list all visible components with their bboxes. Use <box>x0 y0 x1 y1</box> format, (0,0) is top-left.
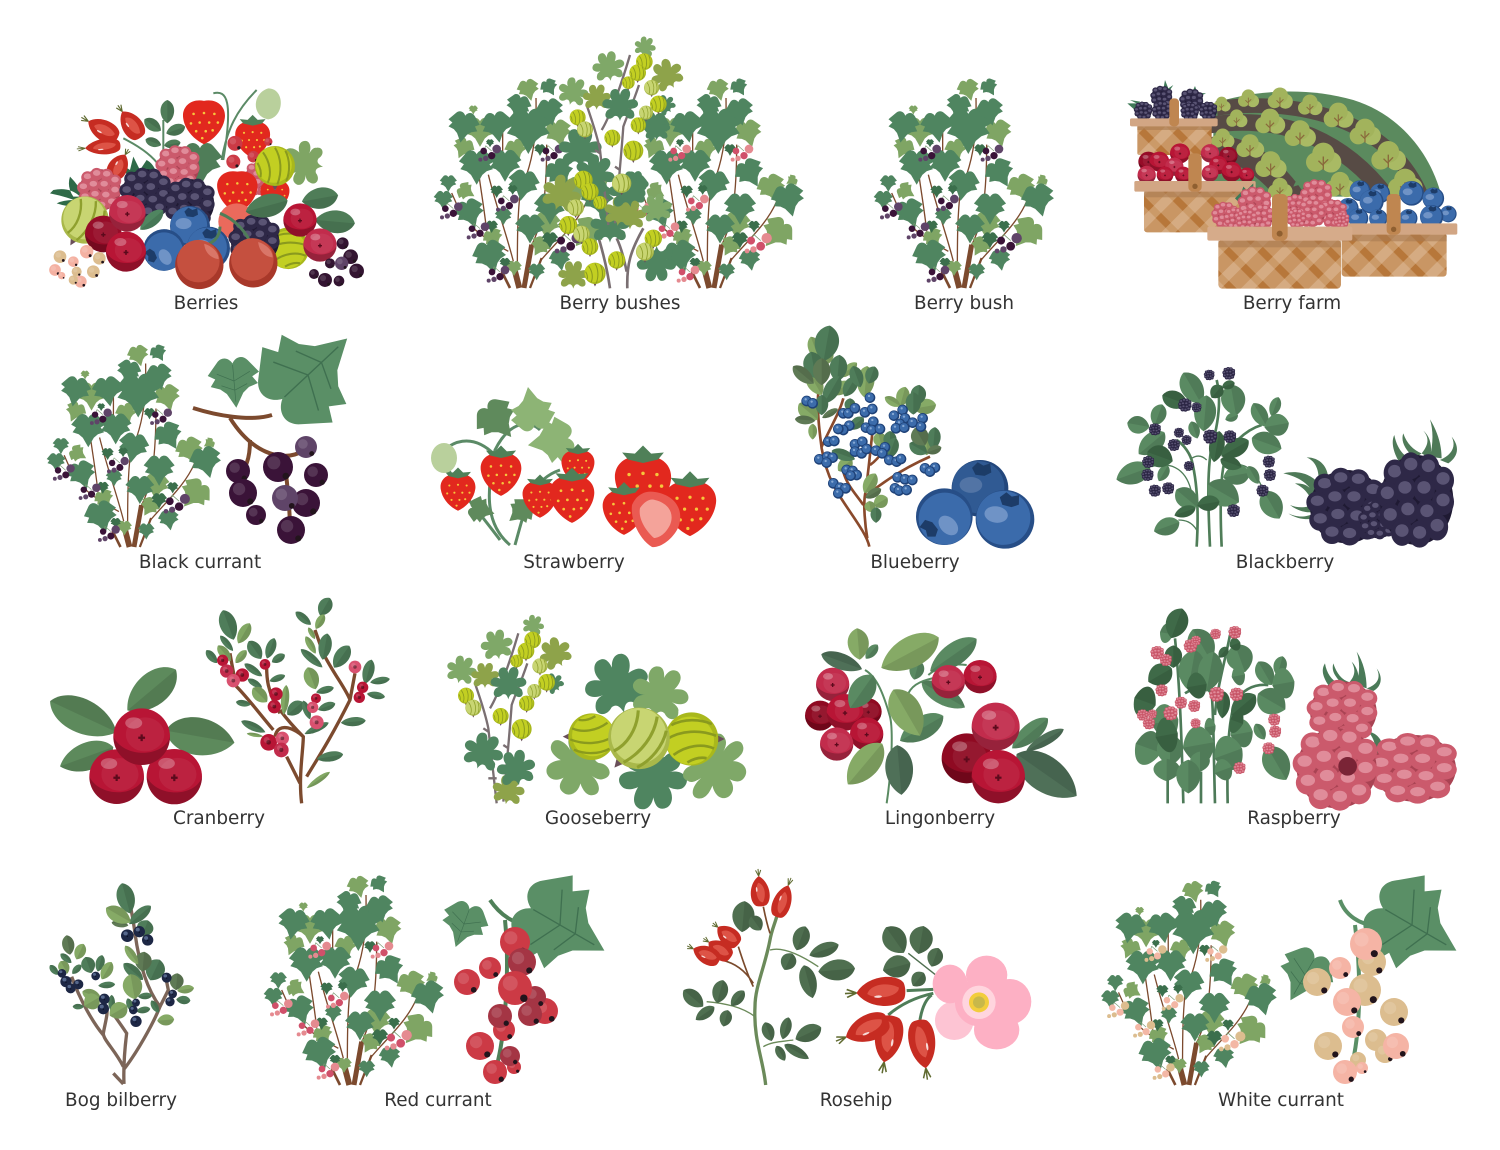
bush <box>47 342 226 547</box>
label: Berry bush <box>914 293 1014 314</box>
bush <box>444 613 577 807</box>
panel: Rosehip <box>679 868 1031 1111</box>
branch and leaves <box>434 860 629 1072</box>
fruits <box>1293 652 1457 811</box>
label: Cranberry <box>173 808 265 829</box>
hips <box>831 976 941 1082</box>
label: Gooseberry <box>545 808 651 829</box>
plant <box>679 868 856 1085</box>
fruits <box>1283 419 1457 548</box>
label: Lingonberry <box>885 808 995 829</box>
label: Rosehip <box>820 1090 892 1111</box>
plant <box>203 595 390 803</box>
flower <box>933 956 1031 1049</box>
label: White currant <box>1218 1090 1344 1111</box>
panel: Blackberry <box>1113 367 1457 573</box>
plant <box>1113 367 1291 547</box>
label: Berries <box>174 293 238 314</box>
label: Raspberry <box>1247 808 1341 829</box>
label: Strawberry <box>523 552 625 573</box>
fruits <box>563 695 725 787</box>
label: Berry farm <box>1243 293 1341 314</box>
panel: Strawberry <box>431 383 716 573</box>
bush <box>874 76 1059 288</box>
stems and back leaves <box>865 629 1087 811</box>
label: Blackberry <box>1236 552 1334 573</box>
illustration: berries pile <box>49 88 364 289</box>
fruits <box>603 446 716 547</box>
panel: Blueberry <box>789 324 1038 573</box>
currants <box>454 927 558 1084</box>
plant <box>1129 605 1298 803</box>
plant <box>47 881 195 1084</box>
label: Black currant <box>139 552 261 573</box>
panel: Lingonberry <box>805 624 1087 829</box>
panel: Black currant <box>47 301 382 573</box>
front leaves <box>819 624 946 796</box>
middle gooseberry bush lower leaves <box>537 116 676 289</box>
panel: Cranberry <box>43 595 390 829</box>
label: Berry bushes <box>560 293 680 314</box>
bush <box>264 873 449 1085</box>
leaves <box>877 921 946 990</box>
plant <box>789 324 943 547</box>
bush <box>1101 878 1282 1085</box>
plant <box>431 383 594 545</box>
illustration: field and baskets <box>1127 80 1457 289</box>
leaves <box>43 657 238 779</box>
panel: Berries <box>49 88 364 314</box>
panel: Berry bush <box>874 76 1059 314</box>
panel: Gooseberry <box>444 613 761 829</box>
panel: Bog bilberry <box>47 881 195 1111</box>
panel: White currant <box>1101 860 1481 1111</box>
currants <box>1303 928 1409 1084</box>
leaves <box>533 648 761 814</box>
label: Blueberry <box>870 552 960 573</box>
currants <box>226 436 328 544</box>
panel: Raspberry <box>1129 605 1457 829</box>
fruits <box>904 460 1038 557</box>
right bush <box>624 76 809 288</box>
panel: Berry bushes <box>434 34 809 314</box>
berries <box>89 708 202 804</box>
branch and leaves <box>193 301 382 530</box>
label: Red currant <box>384 1090 492 1111</box>
label: Bog bilberry <box>65 1090 177 1111</box>
branch and leaves <box>1266 860 1481 1072</box>
berries <box>805 660 1025 803</box>
left bush <box>434 76 619 288</box>
middle gooseberry bush upper <box>555 34 688 229</box>
panel: Red currant <box>264 860 629 1111</box>
panel: Berry farm <box>1127 80 1457 314</box>
middle gooseberries lower <box>559 171 662 287</box>
